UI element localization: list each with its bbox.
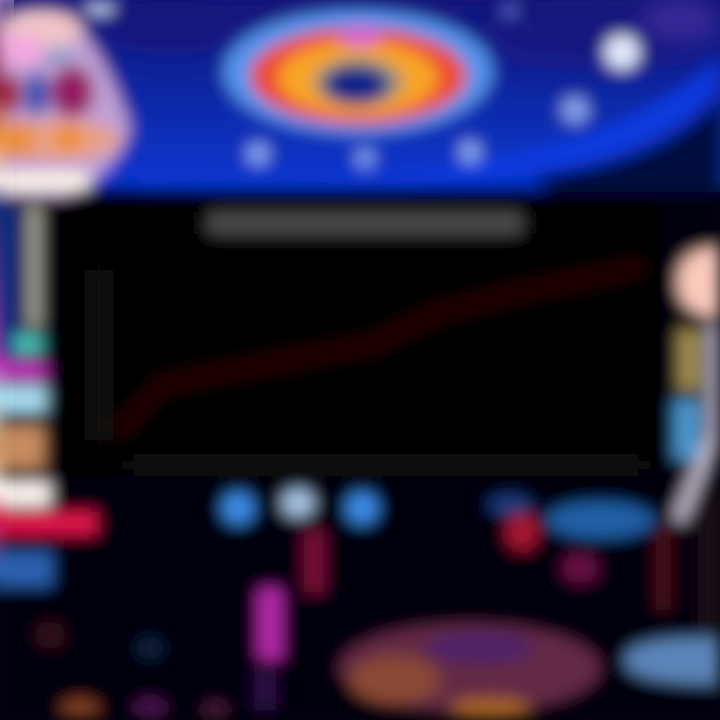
x axis labels	[128, 459, 644, 471]
left ornament: pink and orange tower	[0, 10, 130, 196]
y axis label	[90, 270, 108, 440]
bottom left floor glow	[34, 621, 228, 718]
bottom right blue pedestal	[625, 638, 720, 684]
banner: blue zodiac wheel	[0, 0, 720, 192]
chart title	[208, 212, 522, 234]
left column: striped pillar	[0, 205, 96, 586]
bottom carpet: orange and purple	[340, 624, 600, 718]
lower right dark corner	[530, 100, 720, 192]
chart panel	[60, 202, 660, 476]
magenta column	[254, 530, 324, 710]
wheel stars	[86, 0, 639, 168]
right lower cluster: blue and red shapes	[488, 495, 671, 610]
zodiac medallion	[224, 10, 492, 134]
line chart: rising red line	[122, 268, 636, 428]
right ornament: pink dome and column	[672, 248, 720, 635]
blue badges row	[222, 489, 378, 524]
left edge underlay	[0, 0, 14, 720]
